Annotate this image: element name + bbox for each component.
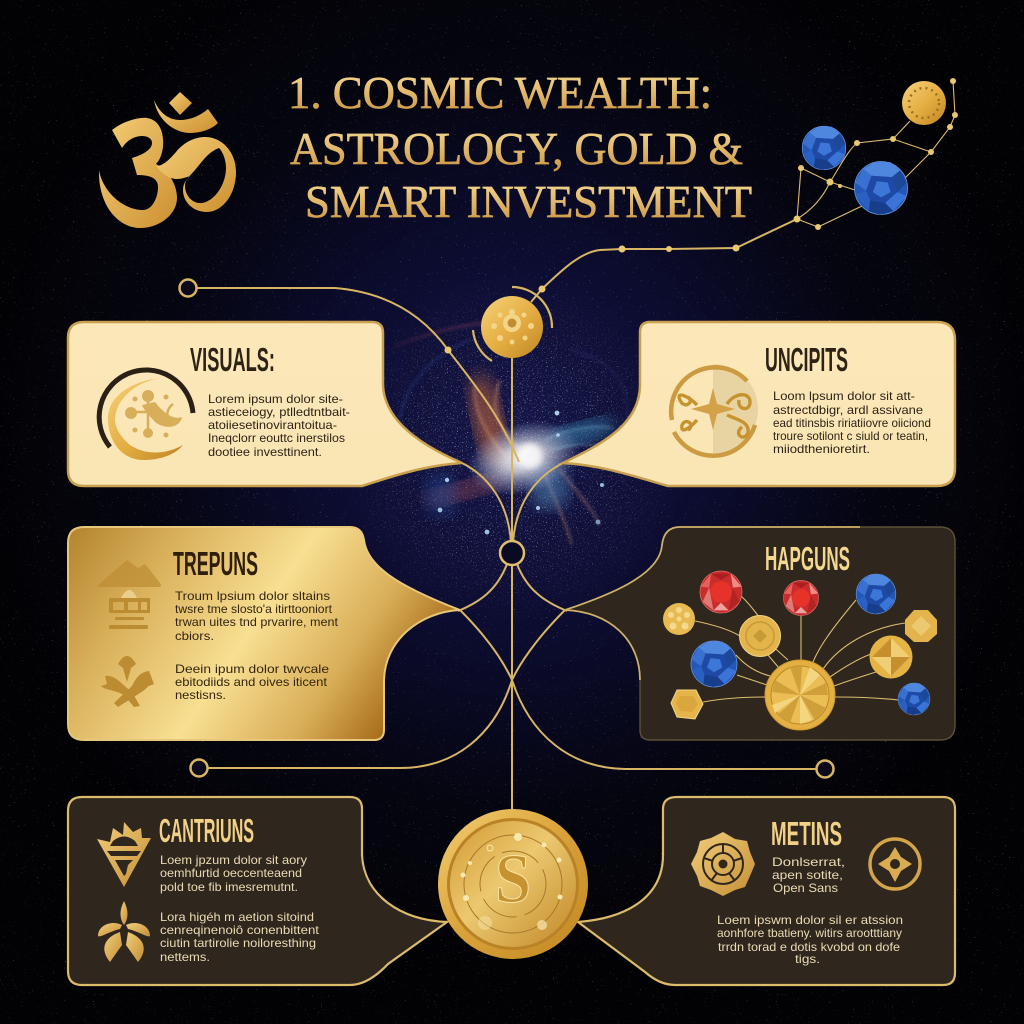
body text: nestisns. bbox=[175, 688, 226, 702]
coin: main center bbox=[765, 660, 835, 730]
gem: blue top bbox=[856, 574, 896, 614]
title: 1. COSMIC WEALTH: bbox=[288, 67, 712, 118]
font note text: Donlserrat, bbox=[772, 855, 845, 869]
gem: blue left bbox=[691, 641, 737, 687]
gem: blue small bbox=[898, 683, 930, 715]
body text: miiodthenioretirt. bbox=[773, 442, 870, 456]
icon: temple and mountain bbox=[98, 560, 161, 629]
body text: ciutin tartirolie noiloresthing bbox=[160, 936, 316, 950]
body text: aonhfore tbatieny. witirs arootttiany bbox=[717, 926, 902, 940]
planet coin bbox=[902, 81, 946, 125]
body text: trrdn torad e dotis kvobd on dofe bbox=[718, 940, 900, 954]
gem: blue right bbox=[854, 161, 908, 215]
panel: visuals bbox=[68, 322, 462, 486]
body text: oemhfurtid oeccenteaend bbox=[160, 866, 302, 880]
icon: crown triangle bbox=[97, 822, 151, 887]
heading: TREPUNS bbox=[173, 545, 258, 582]
node: lower left bbox=[190, 760, 208, 776]
body text: Loem ipswm dolor sil er atssion bbox=[717, 913, 903, 927]
connector lines bbox=[196, 219, 817, 812]
galaxy nebula bbox=[351, 282, 673, 617]
panel: uncipits bbox=[563, 322, 955, 486]
gem: blue left bbox=[802, 126, 846, 170]
coin: diamond bbox=[870, 636, 912, 678]
constellation dots bbox=[538, 78, 958, 292]
panel: trepuns bbox=[68, 527, 460, 740]
panel: cantruins: CANTRIUNS bbox=[159, 812, 254, 849]
body text: twsre tme slosto'a itirttooniort bbox=[175, 602, 333, 616]
coin: small left bbox=[663, 603, 695, 635]
node: lower right bbox=[816, 760, 834, 778]
gem: red small bbox=[783, 580, 819, 616]
heading: METINS bbox=[771, 815, 842, 852]
body text: astieceiogy, ptlledtntbait- bbox=[208, 405, 350, 419]
title: SMART INVESTMENT bbox=[305, 176, 752, 227]
large gold coin: S bbox=[495, 841, 531, 918]
body text: Troum lpsium dolor sltains bbox=[175, 589, 330, 603]
body text: astrectdbigr, ardl assivane bbox=[773, 403, 923, 417]
icon: om symbol bbox=[99, 92, 236, 228]
body text: cenreqinenoiô conenbittent bbox=[160, 923, 320, 937]
body text: cbiors. bbox=[175, 629, 214, 643]
heading: HAPGUNS bbox=[765, 540, 850, 577]
node: top left bbox=[180, 280, 196, 296]
node: center bbox=[500, 541, 524, 565]
body text: atoiiesetinovirantoitua- bbox=[208, 418, 337, 432]
coin: octagon right bbox=[905, 610, 937, 642]
heading: UNCIPITS bbox=[765, 341, 848, 378]
icon: lotus leaves bbox=[98, 901, 150, 962]
node: line junction bbox=[444, 346, 452, 354]
title bbox=[288, 67, 752, 227]
body text: dootiee investtinent. bbox=[208, 445, 322, 459]
body text: troure sotilont c siuld or teatin, bbox=[773, 429, 928, 443]
body text bbox=[208, 392, 350, 459]
coin: medium bbox=[740, 616, 780, 656]
font note text bbox=[772, 855, 845, 895]
body text: tigs. bbox=[795, 952, 820, 966]
icon: gear wheel bbox=[691, 832, 755, 896]
coin: hexagon bbox=[671, 690, 703, 719]
icon: compass coin bbox=[870, 839, 920, 889]
gem connector lines bbox=[695, 596, 905, 702]
title: ASTROLOGY, GOLD & bbox=[290, 123, 743, 174]
panel: hapguns bbox=[565, 527, 955, 740]
body text: Loom lpsum dolor sit att- bbox=[773, 389, 915, 403]
body text: Deein ipum dolor twvcale bbox=[175, 662, 329, 676]
panel: metins bbox=[578, 797, 955, 985]
body text: Lorem ipsum dolor site- bbox=[208, 392, 343, 406]
gem: red large bbox=[700, 571, 742, 613]
body text bbox=[717, 913, 903, 966]
body text bbox=[175, 589, 339, 702]
font note text: Open Sans bbox=[773, 881, 838, 895]
body text bbox=[773, 389, 931, 456]
icon: compass swirl bbox=[671, 364, 758, 456]
body text: Lora higéh m aetion sitoind bbox=[160, 910, 314, 924]
large gold coin bbox=[438, 809, 588, 959]
font note text: apen sotite, bbox=[772, 868, 843, 882]
body text: trwan uites tnd prvarire, ment bbox=[175, 615, 339, 629]
central sun medallion bbox=[473, 287, 552, 361]
body text: ead titinsbis ririatiiovre oiiciond bbox=[773, 416, 931, 430]
body text: Loem jpzum dolor sit aory bbox=[160, 853, 307, 867]
icon: crescent and planets bbox=[99, 370, 193, 460]
body text: Ineqclorr eouttc inerstilos bbox=[208, 431, 345, 445]
body text: nettems. bbox=[160, 950, 210, 964]
body text: pold toe fib imesremutnt. bbox=[160, 880, 298, 894]
body text: ebitodiids and oives iticent bbox=[175, 675, 328, 689]
heading: VISUALS: bbox=[190, 341, 275, 378]
panel: cantruins bbox=[68, 797, 447, 985]
icon: crossed tools bbox=[101, 656, 154, 707]
constellation with gems bbox=[538, 78, 958, 292]
body text bbox=[160, 853, 320, 964]
